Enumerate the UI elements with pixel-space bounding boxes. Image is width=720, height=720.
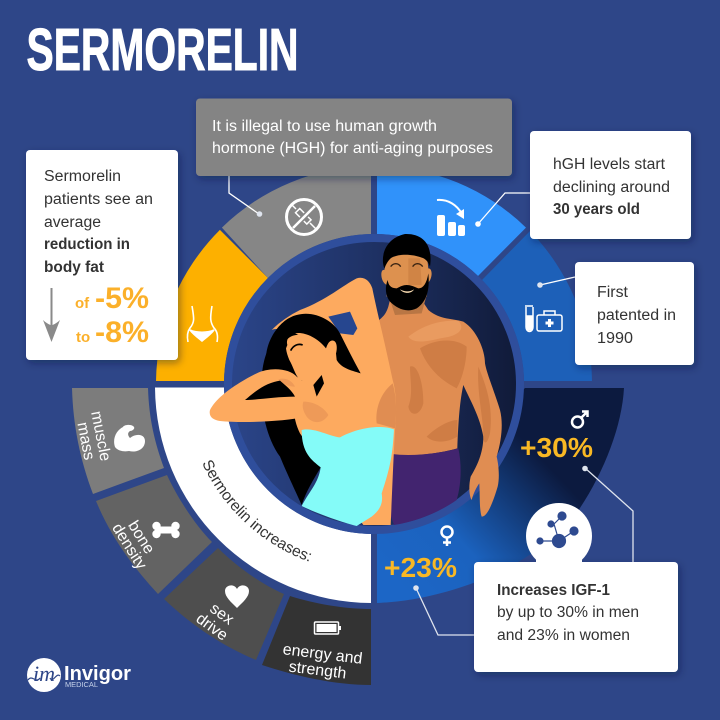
restore gap over arm bbox=[328, 312, 357, 335]
logo: Invigor bbox=[64, 663, 131, 685]
man beard bbox=[386, 273, 429, 310]
callout: hGH decline: declining around bbox=[553, 179, 670, 196]
segment: declining hGH bbox=[377, 166, 526, 276]
callout: hGH decline: hGH levels start bbox=[553, 156, 666, 173]
gap between arm and hair bbox=[328, 312, 357, 338]
stat: women +23% bbox=[384, 526, 457, 583]
icon: bone bbox=[152, 522, 180, 538]
segment: bone density bbox=[96, 475, 212, 594]
stat: men +30% bbox=[520, 412, 593, 463]
man body bbox=[357, 300, 502, 517]
connector: illegal HGH bbox=[229, 176, 262, 217]
callout: patented: 1990 bbox=[597, 330, 633, 347]
callout: hGH decline bbox=[530, 131, 691, 239]
callout: body fat: to bbox=[76, 329, 90, 346]
callout: body fat bbox=[26, 150, 178, 360]
woman hip bbox=[363, 508, 391, 525]
segment: Sermorelin increases bbox=[155, 388, 371, 603]
callout: body fat: of bbox=[75, 295, 90, 312]
woman back hair bbox=[261, 313, 333, 505]
woman lock of hair bbox=[313, 375, 324, 397]
label: drive: drive bbox=[193, 610, 231, 644]
man smile bbox=[400, 289, 414, 293]
segment: IGF-1 gradient bbox=[377, 388, 624, 603]
hair between forearm and upper arm bbox=[245, 381, 295, 400]
callout: hGH decline: 30 years old bbox=[553, 201, 640, 218]
man eyes bbox=[391, 264, 423, 267]
label: energy and: energy and bbox=[282, 641, 363, 668]
callout: body fat: patients see an bbox=[44, 191, 153, 208]
label: bone: bone bbox=[124, 518, 158, 557]
woman face bbox=[286, 335, 331, 380]
connector: women IGF bbox=[413, 585, 474, 635]
man nose shade bbox=[408, 258, 422, 285]
icon: waist bbox=[187, 306, 218, 342]
label: mass: mass bbox=[73, 421, 97, 462]
stat: women +23%: +23% bbox=[384, 552, 457, 583]
stat: men +30%: +30% bbox=[520, 432, 593, 463]
segment: patented bbox=[482, 231, 592, 381]
woman dress bbox=[302, 427, 394, 526]
callout: body fat: reduction in bbox=[44, 236, 130, 253]
woman front hair bbox=[266, 314, 361, 373]
icon: heart bbox=[225, 585, 249, 608]
icon: down arrow bbox=[43, 288, 60, 342]
callout: IGF-1: by up to 30% in men bbox=[497, 604, 639, 621]
label: muscle: muscle bbox=[87, 410, 114, 463]
woman raised arm and torso bbox=[272, 278, 396, 525]
man hair bbox=[383, 234, 431, 268]
woman ear bbox=[327, 341, 337, 360]
man shading bbox=[408, 340, 491, 442]
logo: im bbox=[33, 661, 55, 686]
connector: patented bbox=[537, 277, 575, 288]
man neck bbox=[388, 295, 427, 315]
icon: test tube and medical kit bbox=[525, 306, 562, 332]
segment: sex drive bbox=[164, 548, 284, 660]
callout: body fat: Sermorelin bbox=[44, 168, 121, 185]
connector: men IGF bbox=[582, 466, 633, 562]
icon: bicep bbox=[114, 425, 145, 452]
icon: molecule bbox=[526, 503, 592, 569]
woman eye bbox=[291, 344, 303, 351]
callout: patented bbox=[575, 262, 694, 365]
callout: body fat: -5% bbox=[95, 282, 149, 315]
segment: body fat bbox=[156, 230, 268, 381]
callout: illegal HGH bbox=[196, 98, 512, 176]
central circle bbox=[228, 238, 520, 530]
callout: illegal HGH: hormone (HGH) for anti-aging purposes bbox=[212, 140, 493, 157]
man lit chest bbox=[408, 321, 461, 342]
man face bbox=[381, 253, 432, 297]
icon: female symbol bbox=[442, 526, 452, 546]
curved label: Sermorelin increases: bbox=[203, 460, 312, 562]
label: strength: strength bbox=[288, 659, 347, 682]
woman side shade bbox=[376, 383, 396, 428]
logo: MEDICAL bbox=[65, 680, 98, 689]
callout: patented: First bbox=[597, 284, 629, 301]
callout: body fat: body fat bbox=[44, 259, 104, 276]
callout: patented: patented in bbox=[597, 307, 676, 324]
callout: IGF-1: Increases IGF-1 bbox=[497, 582, 610, 599]
icon: no syringe bbox=[286, 200, 322, 234]
callout: body fat: -8% bbox=[95, 316, 149, 349]
man shorts bbox=[381, 448, 461, 525]
connector: hGH decline bbox=[475, 193, 530, 227]
icon: declining bars bbox=[437, 200, 465, 236]
woman shoulder shade bbox=[303, 402, 328, 422]
label: density: density bbox=[108, 521, 149, 573]
callout: illegal HGH: It is illegal to use human growth bbox=[212, 118, 437, 135]
segment: illegal HGH bbox=[222, 166, 371, 278]
callout: IGF-1 bbox=[474, 503, 678, 672]
segment: energy and strength bbox=[262, 596, 371, 685]
man side visible under arm bbox=[348, 327, 365, 373]
illustration: couple bbox=[210, 234, 502, 526]
callout: IGF-1: and 23% in women bbox=[497, 627, 630, 644]
callout: body fat: average bbox=[44, 214, 101, 231]
label: sex: sex bbox=[207, 600, 237, 629]
logo bbox=[27, 658, 131, 692]
icon: male symbol bbox=[572, 412, 588, 428]
segment: muscle mass bbox=[72, 388, 164, 494]
icon: battery bbox=[314, 622, 341, 634]
woman hand shade bbox=[278, 379, 295, 387]
woman forearm and hand bbox=[210, 369, 317, 422]
title: SERMORELIN bbox=[26, 17, 298, 83]
